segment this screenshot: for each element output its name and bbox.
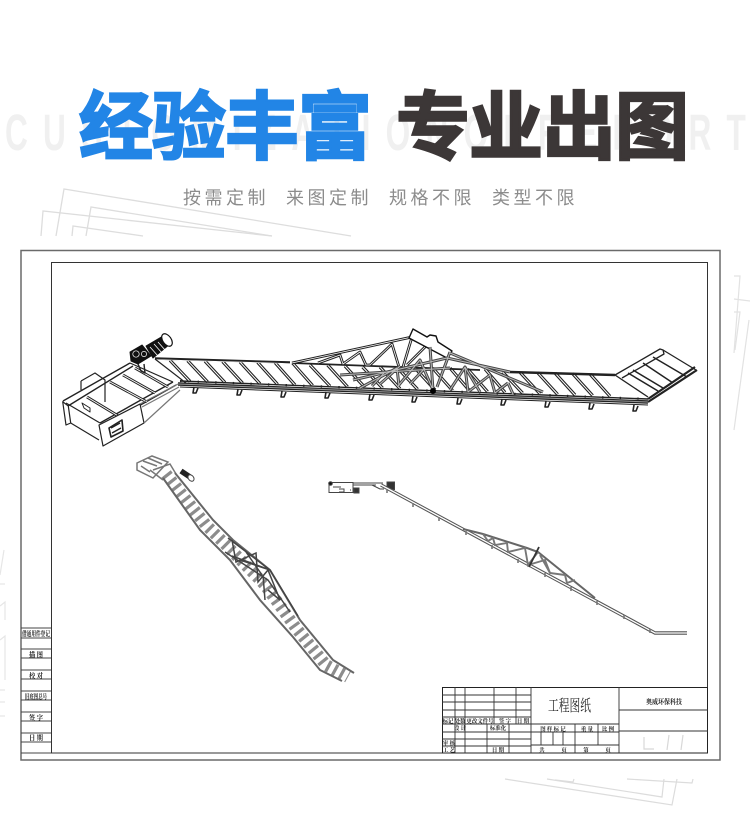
decorative sketch lines: right side (734, 276, 750, 430)
subtitle tags (183, 188, 578, 208)
strip labels: 签 字 (29, 713, 43, 722)
top lifting plate (409, 329, 452, 358)
title block labels: 设 计 (454, 724, 467, 732)
title block labels: 日 期 (492, 746, 505, 754)
side elevation view of conveyor (329, 482, 687, 633)
pivot joint (430, 388, 436, 394)
title block labels: 重 量 (581, 725, 594, 733)
elevation: double rail (381, 485, 687, 633)
elevation: truss top chord (463, 529, 595, 598)
subtitle tags: 类型不限 (492, 188, 578, 208)
company name: 奥威环保科技 (646, 697, 682, 706)
faint marks in title block (644, 735, 683, 750)
conveyor side rails (155, 358, 648, 405)
right discharge hopper (615, 349, 697, 402)
drive motor (130, 332, 174, 373)
title block labels: 页 (605, 746, 611, 754)
title (79, 86, 688, 169)
front truss (340, 347, 543, 394)
conveyor slats (170, 360, 610, 396)
outer frame (21, 250, 720, 760)
left feed frame (63, 363, 180, 446)
plan view: right edge (175, 473, 354, 673)
strip labels: 旧底图总号 (25, 692, 47, 701)
background ghost lettering: CUSTOMIZATIONOFREPORT (5, 104, 746, 161)
title block labels (443, 717, 615, 754)
decorative sketch lines: left side (0, 550, 5, 716)
title block labels: 页 (561, 746, 567, 754)
elevation: mast (529, 547, 539, 567)
elevation: legs (387, 489, 650, 633)
elevation: truss webs (483, 534, 575, 583)
title block labels: 标准化 (490, 724, 507, 732)
strip labels: 校 对 (29, 671, 43, 680)
inner frame (52, 262, 708, 753)
title block labels: 比 例 (602, 725, 615, 733)
title block labels: 图 样 标 记 (540, 725, 566, 733)
back truss (292, 337, 480, 370)
elevation: feed head box (329, 482, 394, 493)
decorative sketch lines: top left (41, 189, 351, 236)
drawing name: 工程图纸 (548, 697, 591, 715)
title: blue part: 经验丰富 (79, 86, 371, 169)
panel: engineering drawing sheet (21, 250, 720, 760)
title block labels: 标记 (443, 717, 454, 725)
title block labels: 工 艺 (443, 746, 456, 754)
title block labels: 签 字 (499, 717, 512, 725)
support legs (193, 387, 638, 411)
title block labels: 共 (539, 746, 545, 754)
strip labels: 描 图 (29, 650, 43, 659)
decorative sketch lines: bottom right (505, 779, 693, 805)
title block grid (442, 687, 708, 753)
strip labels: 日 期 (29, 733, 43, 742)
strip labels: 借通用件登记 (22, 629, 50, 638)
left title strip (21, 628, 51, 753)
plan view: truss (225, 538, 298, 616)
plan view: cross slats (166, 474, 348, 677)
plan view of conveyor (137, 456, 354, 681)
subtitle tags: 按需定制 (183, 188, 269, 208)
title block labels: 处数 (455, 717, 466, 725)
subtitle tags: 来图定制 (286, 188, 372, 208)
title block (442, 687, 708, 754)
title: dark part: 专业出图 (396, 86, 688, 169)
plan view: feed head (137, 456, 176, 480)
title block labels: 审 核 (443, 739, 456, 747)
plan view: motor (181, 471, 190, 477)
plan view: left edge (163, 478, 342, 681)
title block labels: 第 (583, 746, 589, 754)
main conveyor isometric view (63, 329, 697, 446)
subtitle tags: 规格不限 (389, 188, 475, 208)
strip labels (22, 629, 50, 742)
title block labels: 日 期 (517, 717, 530, 725)
title block labels: 更改文件号 (467, 717, 494, 725)
